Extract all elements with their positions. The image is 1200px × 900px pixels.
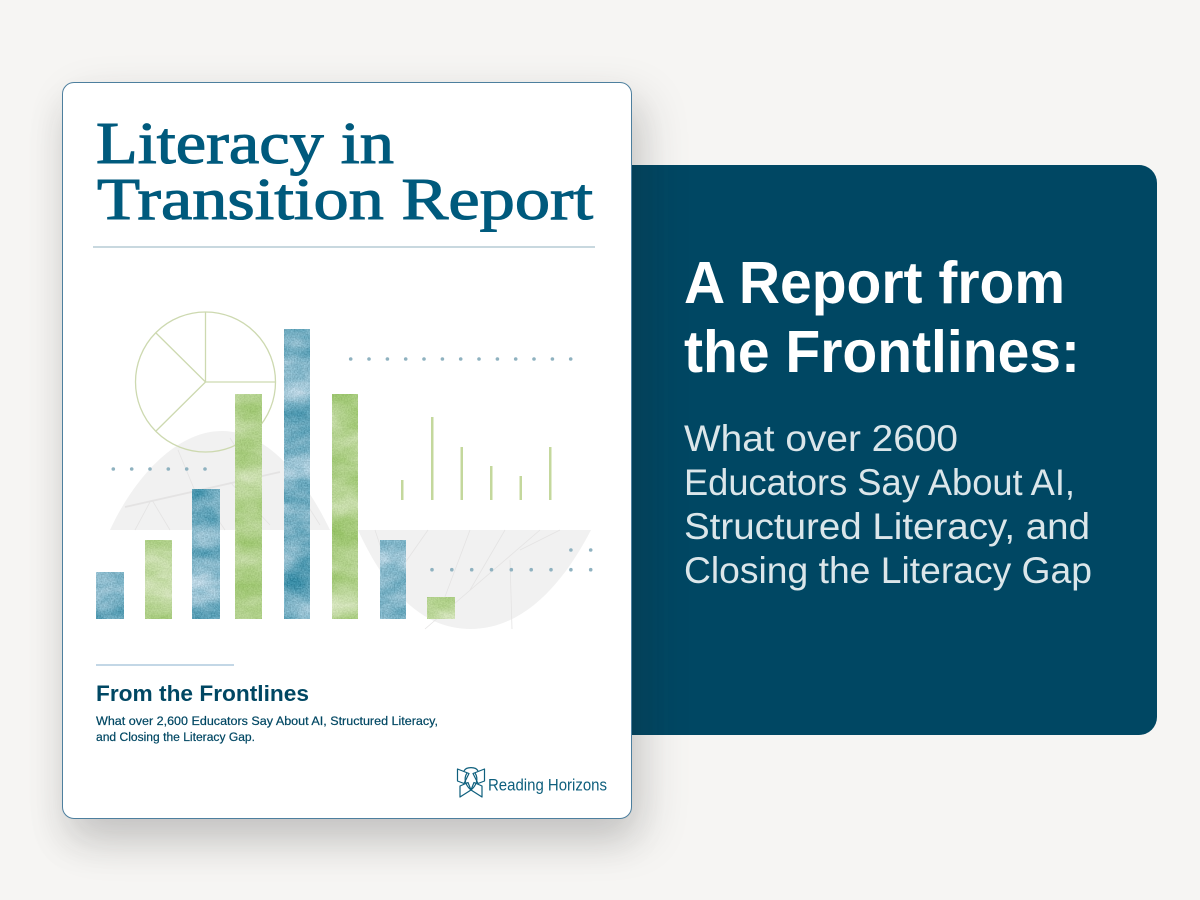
panel subheading text: Structured Literacy, and <box>684 506 1090 547</box>
cover description text <box>96 716 438 744</box>
title: Literacy in Transition Report: Transition Report <box>97 166 594 232</box>
thin bar chart <box>401 417 552 500</box>
title: Literacy in Transition Report <box>96 110 594 232</box>
panel subheading text: Educators Say About AI, <box>684 462 1075 503</box>
panel headline: A Report from the Frontlines <box>684 250 1080 385</box>
panel: report cover card <box>62 82 632 819</box>
illustration: leaf shapes behind chart <box>110 431 591 629</box>
panel headline: A Report from the Frontlines: the Frontlines: <box>684 319 1080 385</box>
cover description text: and Closing the Literacy Gap. <box>96 732 255 744</box>
title: Literacy in Transition Report: Literacy in <box>96 110 394 176</box>
bar chart: textured blue and green bars <box>96 329 455 619</box>
panel subheading text: What over 2600 <box>684 418 958 459</box>
panel: dark blue headline panel <box>600 165 1157 735</box>
panel subheading text <box>684 418 1092 591</box>
icon: open book butterfly mark <box>458 768 484 797</box>
panel headline: A Report from the Frontlines: A Report from <box>684 250 1065 316</box>
logo wordmark: Reading Horizons <box>488 776 607 794</box>
subheading: From the Frontlines: From the Frontlines <box>96 681 309 706</box>
logo: Reading Horizons <box>458 768 607 797</box>
panel subheading text: Closing the Literacy Gap <box>684 550 1092 591</box>
cover description text: What over 2,600 Educators Say About AI, Structured Literacy, <box>96 716 438 728</box>
dotted lines <box>112 357 592 572</box>
pie chart outline <box>136 312 276 452</box>
